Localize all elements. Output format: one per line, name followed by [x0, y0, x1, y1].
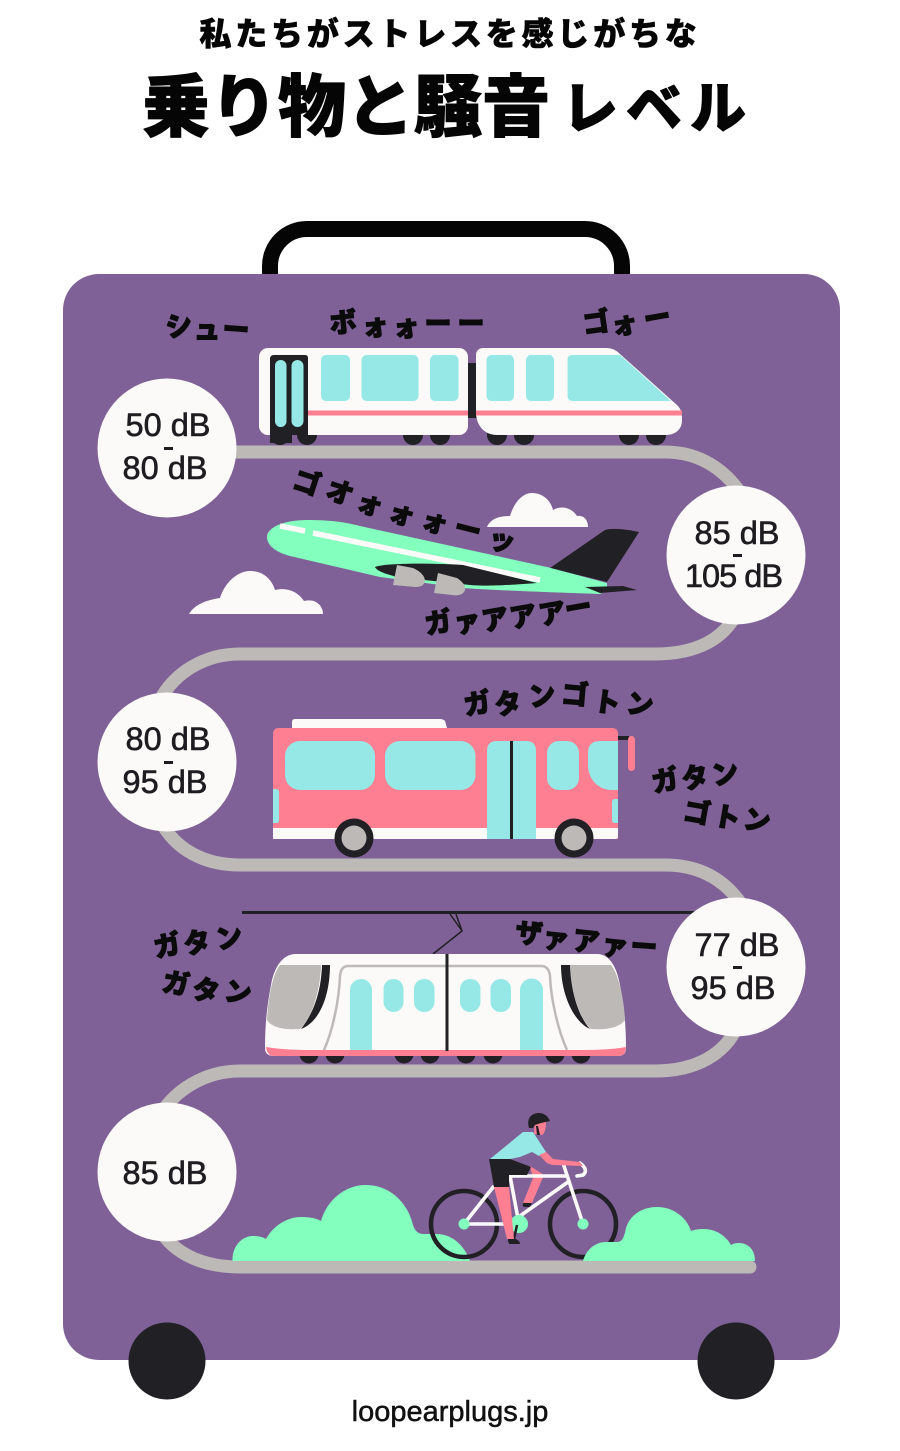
sound: ゴオォォォーッ: ー [451, 505, 486, 550]
rider shirt [490, 1132, 546, 1159]
dB circle: airplane: 105 dB [685, 558, 782, 594]
sound: ガァアアアー [421, 584, 594, 642]
dB circle: bicycle [98, 1102, 236, 1242]
sound: ゴオォォォーッ: ォ [418, 497, 453, 542]
sound: ガタン ゴトン (bus side) [647, 750, 774, 840]
dB circle: airplane [666, 486, 806, 624]
sound: ガァアアアー: ガ [421, 599, 454, 642]
train windows [275, 355, 671, 427]
sound: ゴオォォォーッ: ォ [385, 489, 420, 534]
cloud: lower [189, 571, 323, 614]
chainring [510, 1215, 528, 1233]
footer url: loopearplugs.jp [352, 1396, 548, 1428]
clouds and airplane [189, 493, 639, 614]
tram center line [446, 954, 448, 1051]
sound: ガァアアアー: ァ [450, 598, 483, 641]
tram door outline [324, 966, 567, 1050]
sound: ガタン ゴトン (bus side): ン [741, 797, 774, 840]
sound: ガタン ガタン (tram): ガ [160, 960, 193, 1003]
rear shoe [523, 1203, 532, 1207]
cyclist [431, 1113, 616, 1257]
suitcase handle [270, 229, 622, 278]
sound: ガタン ガタン (tram): ガ [149, 922, 184, 965]
sound: ガタン ゴトン (bus side): ト [711, 794, 744, 837]
tram [242, 911, 694, 1064]
sound: ゴォー [580, 294, 673, 343]
dB circle: bus: 95 dB [123, 764, 207, 800]
rider arm [539, 1152, 583, 1166]
sound: ザァアァー: ア [571, 919, 602, 960]
sound: シュー: ュ [194, 308, 220, 347]
sound: シュー [161, 302, 251, 348]
sound: ガタン ゴトン (bus top): ン [624, 681, 656, 724]
overhead wire [242, 911, 694, 914]
sound: ゴオォォォーッ: ゴ [289, 458, 326, 503]
sound: ガタン ゴトン (bus side): ゴ [681, 789, 714, 832]
tram front windows [267, 965, 625, 1029]
crank [514, 1225, 517, 1239]
dB circle: tram [666, 898, 806, 1036]
airplane wing [375, 564, 537, 586]
hubs [458, 1218, 588, 1230]
sound: ガタン ガタン (tram): タ [190, 967, 223, 1010]
front leg [494, 1187, 514, 1239]
train wheels [270, 425, 666, 445]
sound: ゴォー: ゴ [580, 299, 612, 342]
front shoe [508, 1239, 520, 1244]
train stripe [308, 410, 682, 416]
sound: ガタン ゴトン (bus top) [460, 672, 656, 724]
sound: ザァアァー: ァ [600, 923, 631, 964]
sound: ゴオォォォーッ: ッ [485, 516, 520, 561]
sound: ゴォー: ォ [607, 300, 640, 343]
sound: ガタン ガタン (tram) [149, 914, 255, 1012]
dB circle: tram: 77 dB [695, 927, 779, 963]
dB circle: bus [98, 692, 236, 832]
helmet [528, 1113, 550, 1135]
sound: ガタン ゴトン (bus side): タ [677, 754, 712, 797]
pantograph [433, 914, 462, 954]
airplane engines [393, 565, 465, 595]
bush: right [583, 1207, 755, 1261]
sound: ゴオォォォーッ: ォ [353, 479, 388, 524]
bus wheels [334, 818, 594, 858]
title: main heading: 乗り物と騒音 [142, 52, 550, 151]
bus mirror [618, 736, 635, 771]
dB circle: bicycle: 85 dB [123, 1155, 207, 1191]
title: subtitle line: 私たちがストレスを感じがちな [199, 9, 701, 55]
sound: ガァアアアー: ア [506, 593, 539, 636]
sound: ザァアァー [514, 911, 659, 965]
sound: ゴオォォォーッ [289, 458, 520, 561]
winding track [160, 452, 750, 1267]
dB circle: airplane: 85 dB [695, 515, 779, 551]
bicycle frame [464, 1163, 585, 1224]
sound: ボォォーー [327, 300, 484, 345]
train door [270, 355, 308, 443]
sound: ガタン ゴトン (bus top): ゴ [560, 672, 590, 713]
tram body [265, 954, 626, 1056]
sound: ガタン ゴトン (bus top): ト [591, 679, 623, 722]
tram windows [350, 979, 543, 1050]
sound: ボォォーー: ー [458, 302, 484, 341]
sound: ガタン ガタン (tram): タ [179, 919, 214, 962]
tram dark window edges [301, 965, 590, 1029]
title: main heading: レベル [562, 64, 754, 145]
sound: ゴォー: ー [640, 294, 673, 337]
sound: ボォォーー: ー [424, 302, 452, 341]
train connector [466, 363, 478, 418]
suitcase body [63, 274, 840, 1360]
sound: ボォォーー: ォ [359, 303, 390, 344]
bullet train [259, 348, 682, 445]
front car [476, 348, 682, 435]
tram wheels [300, 1044, 590, 1064]
sound: ガタン ゴトン (bus top): タ [491, 680, 524, 723]
rear leg [523, 1166, 544, 1203]
airplane tail [550, 529, 639, 582]
sound: ボォォーー: ボ [327, 300, 358, 341]
dB circle: tram: 95 dB [691, 970, 775, 1006]
rear car [259, 348, 468, 435]
bush: left [232, 1185, 470, 1261]
airplane stabilizer [585, 586, 637, 593]
airplane stripes [280, 526, 540, 580]
bicycle wheels [431, 1191, 616, 1257]
bus windows [273, 741, 618, 839]
sound: シュー: ー [221, 307, 251, 348]
sound: ザァアァー: ー [629, 924, 659, 965]
sound: ザァアァー: ザ [514, 911, 545, 952]
bus body [273, 728, 618, 839]
rider head [534, 1120, 546, 1135]
sound: ガタン ガタン (tram): ン [222, 969, 255, 1012]
sound: ボォォーー: ォ [390, 304, 421, 345]
dB circle: train [98, 378, 236, 518]
sound: ガタン ゴトン (bus side): ン [707, 750, 742, 793]
sound: ガァアアアー: ア [478, 596, 511, 639]
rider shorts [489, 1159, 531, 1187]
bus roof unit [292, 719, 447, 728]
airplane body [267, 520, 607, 594]
tram pink underside [266, 1047, 626, 1056]
bus lower stripe [273, 828, 618, 839]
bus [273, 719, 635, 858]
dB circle: bus: 80 dB [126, 721, 210, 757]
dB circle: train: 50 dB [126, 407, 210, 443]
sound: ガタン ゴトン (bus top): ン [526, 672, 558, 715]
sound: ガタン ゴトン (bus top): ガ [460, 680, 493, 723]
bus door line [510, 741, 513, 839]
sound: ガタン ゴトン (bus side): ガ [647, 757, 682, 800]
suitcase wheels [128, 1322, 774, 1400]
cloud: upper [487, 493, 588, 527]
sound: ガァアアアー: ア [535, 590, 568, 633]
sound: ザァアァー: ァ [541, 916, 572, 957]
sound: ゴオォォォーッ: オ [322, 468, 359, 513]
sound: ガァアアアー: ー [561, 584, 594, 627]
sound: ガタン ガタン (tram): ン [211, 914, 246, 957]
dB circle: train: 80 dB [123, 450, 207, 486]
sound: シュー: シ [161, 302, 196, 345]
